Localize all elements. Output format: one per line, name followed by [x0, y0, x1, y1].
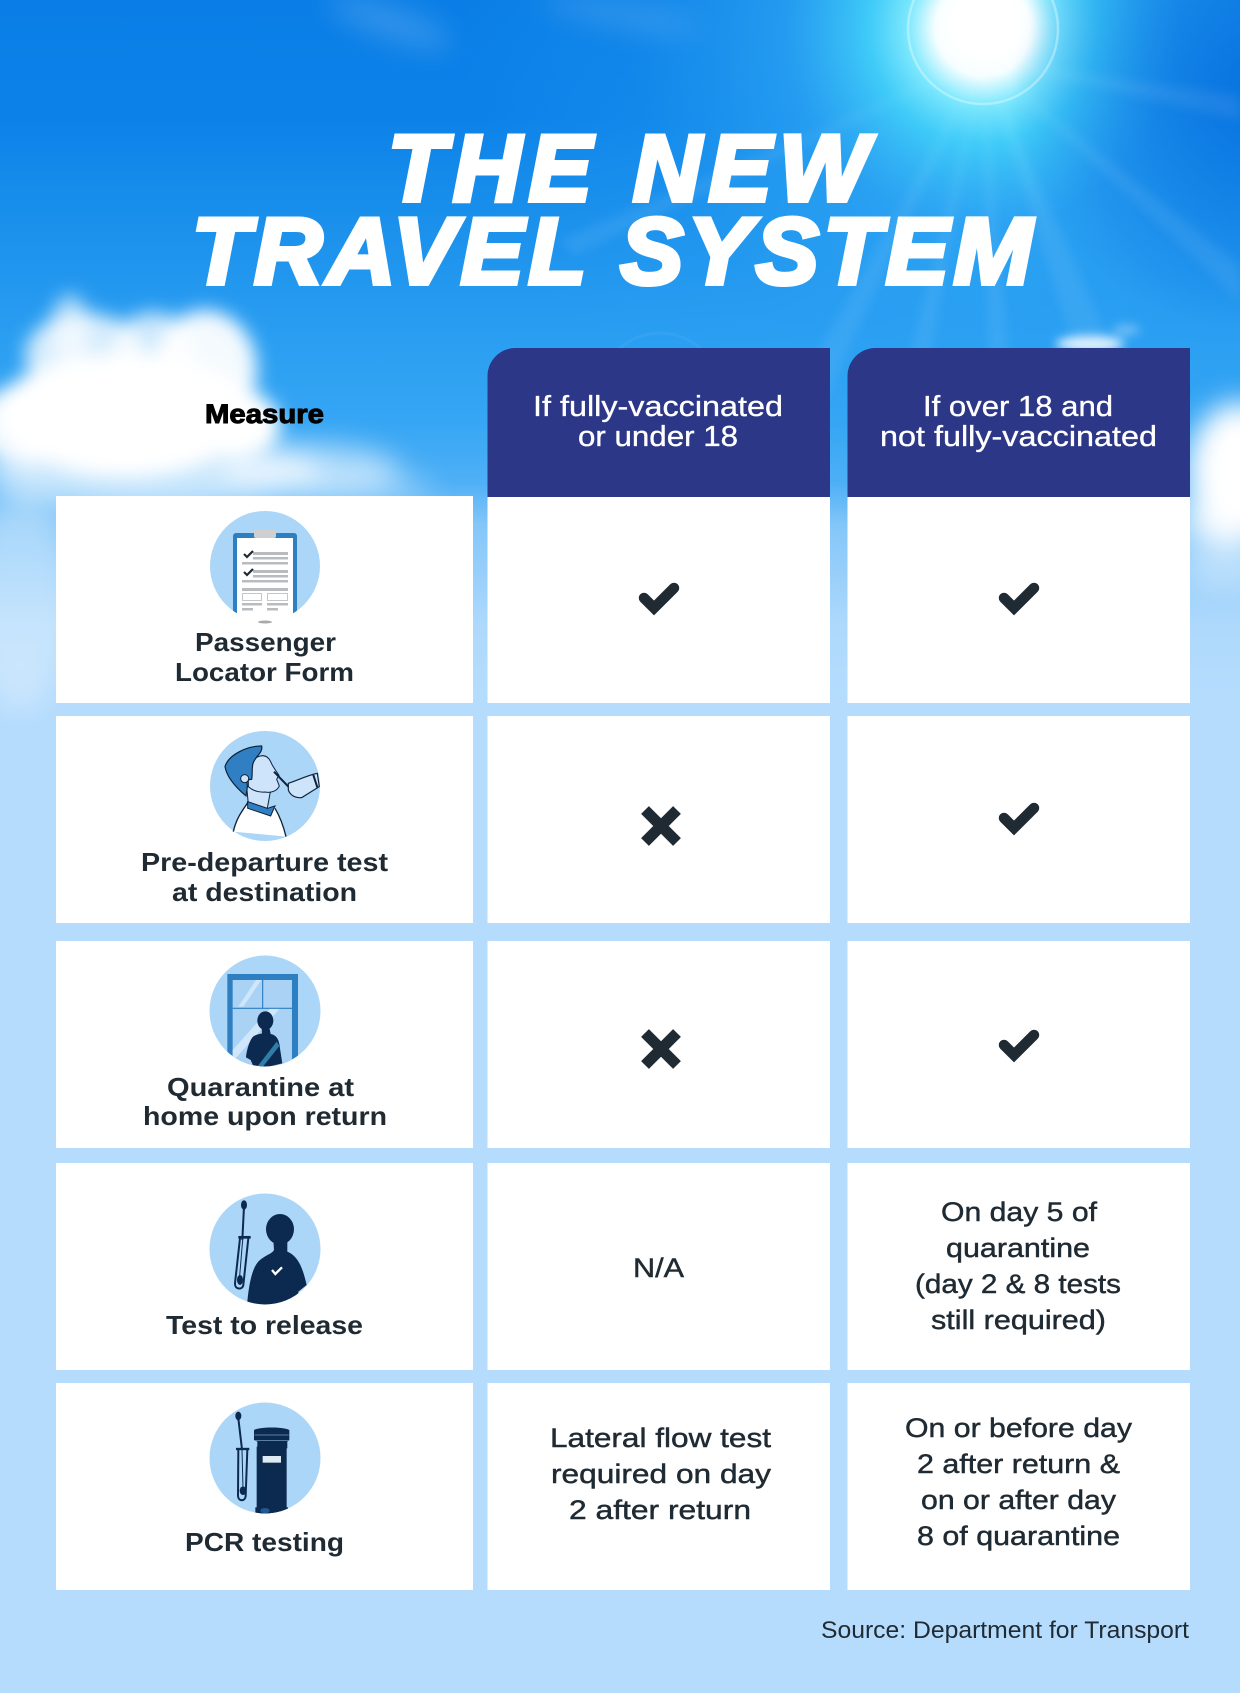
text: on or before day: 8 of quarantine — [917, 1521, 1120, 1551]
column heading: fully vaccinated: or under 18 — [578, 421, 738, 453]
label — [143, 1072, 387, 1131]
row 5: PCR testing — [56, 1383, 1190, 1590]
column heading: fully vaccinated: If fully-vaccinated — [533, 391, 783, 423]
row 4: test to release — [56, 1163, 1190, 1370]
label: Pre-departure test — [141, 847, 388, 877]
text: on or before day: On or before day — [905, 1413, 1133, 1443]
row 2: pre-departure test — [56, 716, 1190, 923]
title: TRAVEL SYSTEM — [192, 198, 1034, 304]
label: Passenger — [195, 627, 336, 657]
tick: not vaccinated — [1004, 808, 1034, 828]
text: N/A: N/A — [633, 1253, 684, 1283]
column heading: fully vaccinated — [488, 348, 830, 497]
text: quarantine day 5: On day 5 of — [941, 1197, 1098, 1227]
text: lateral flow: Lateral flow test — [550, 1423, 772, 1453]
cross: fully vaccinated — [645, 810, 677, 842]
icon: nasal swab — [210, 731, 320, 841]
column heading: not vaccinated: If over 18 and — [923, 391, 1113, 423]
icon: clipboard form — [210, 511, 320, 624]
column heading: not vaccinated: not fully-vaccinated — [880, 421, 1157, 453]
label — [141, 847, 388, 907]
title — [192, 116, 1034, 304]
text: lateral flow: required on day — [551, 1459, 772, 1489]
label — [175, 627, 354, 687]
row 1: passenger locator form — [56, 496, 1190, 703]
icon: post box and test tube — [210, 1402, 320, 1518]
label: at destination — [172, 877, 357, 907]
text: on or before day — [905, 1413, 1133, 1551]
text: lateral flow — [550, 1423, 772, 1525]
text: lateral flow: 2 after return — [569, 1495, 751, 1525]
label: PCR testing — [185, 1527, 344, 1557]
label: Locator Form — [175, 657, 354, 687]
tick: fully vaccinated — [644, 588, 674, 608]
cross: fully vaccinated — [645, 1033, 677, 1065]
column heading: measure: Measure — [205, 399, 324, 429]
icon: person with test tube — [210, 1194, 320, 1310]
column heading: not vaccinated — [848, 348, 1190, 497]
text: quarantine day 5: (day 2 & 8 tests — [915, 1269, 1121, 1299]
label: Test to release — [166, 1310, 363, 1340]
label: home upon return — [143, 1101, 387, 1131]
text: quarantine day 5 — [915, 1197, 1121, 1335]
cloud: right — [1056, 325, 1240, 589]
text: on or before day: on or after day — [921, 1485, 1117, 1515]
text: quarantine day 5: quarantine — [946, 1233, 1090, 1263]
text: on or before day: 2 after return & — [917, 1449, 1120, 1479]
icon: person at window — [210, 956, 320, 1071]
sun — [908, 0, 1058, 104]
tick: not vaccinated — [1004, 1035, 1034, 1055]
label: Quarantine at — [167, 1072, 354, 1102]
source note: Source: Department for Transport — [821, 1617, 1189, 1644]
text: quarantine day 5: still required) — [931, 1305, 1106, 1335]
cloud: left — [0, 294, 435, 710]
title: THE NEW — [388, 116, 875, 220]
tick: not vaccinated — [1004, 588, 1034, 608]
row 3: quarantine at home — [56, 941, 1190, 1148]
